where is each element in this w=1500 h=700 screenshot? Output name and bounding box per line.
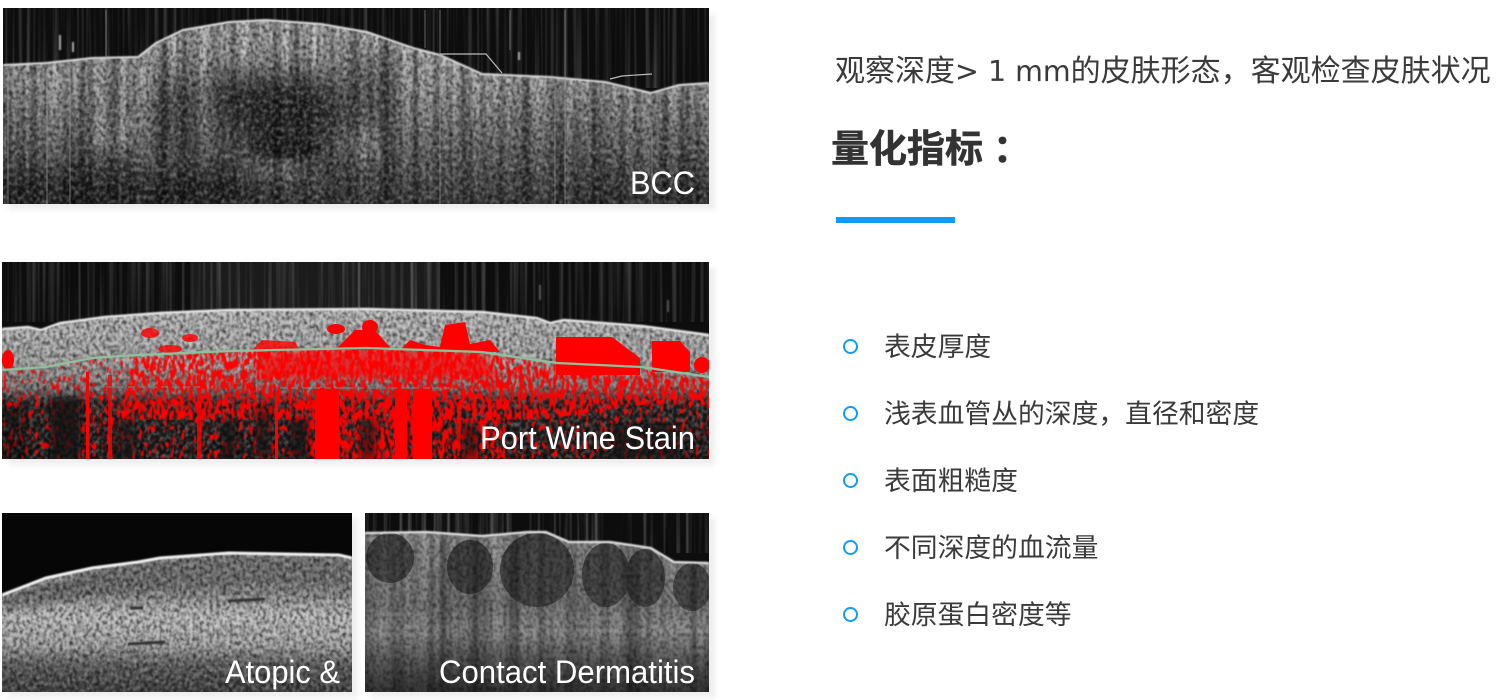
label: Port Wine Stain: Port Wine Stain [480,420,695,456]
panel: BCC scan [3,8,715,210]
panel: Port Wine Stain scan [2,262,715,465]
list item: surface roughness: 表面粗糙度 [884,466,1018,496]
intro text: 观察深度> 1 mm的皮肤形态，客观检查皮肤状况 [835,55,1491,88]
left column: OCT scan images [2,8,715,698]
heading accent bar [836,217,955,223]
list item: superficial plexus: 浅表血管丛的深度，直径和密度 [884,399,1259,429]
panel: Contact Dermatitis scan [365,513,715,698]
blisters [366,533,711,611]
heading: 量化指标: ： [993,129,1031,171]
list: quantitative indicators [843,332,1259,630]
label: Atopic &: Atopic & [225,654,340,690]
list item: collagen density: 胶原蛋白密度等 [884,600,1072,630]
list item: epidermal thickness: 表皮厚度 [884,332,991,362]
heading: 量化指标: 量化指标 [831,129,983,171]
panel: Atopic scan [2,513,358,698]
label: BCC: BCC [630,165,695,201]
green depth line [2,348,709,377]
red vascular signal [2,320,710,459]
label: Contact Dermatitis: Contact Dermatitis [439,654,695,690]
list item: blood flow: 不同深度的血流量 [884,533,1098,563]
